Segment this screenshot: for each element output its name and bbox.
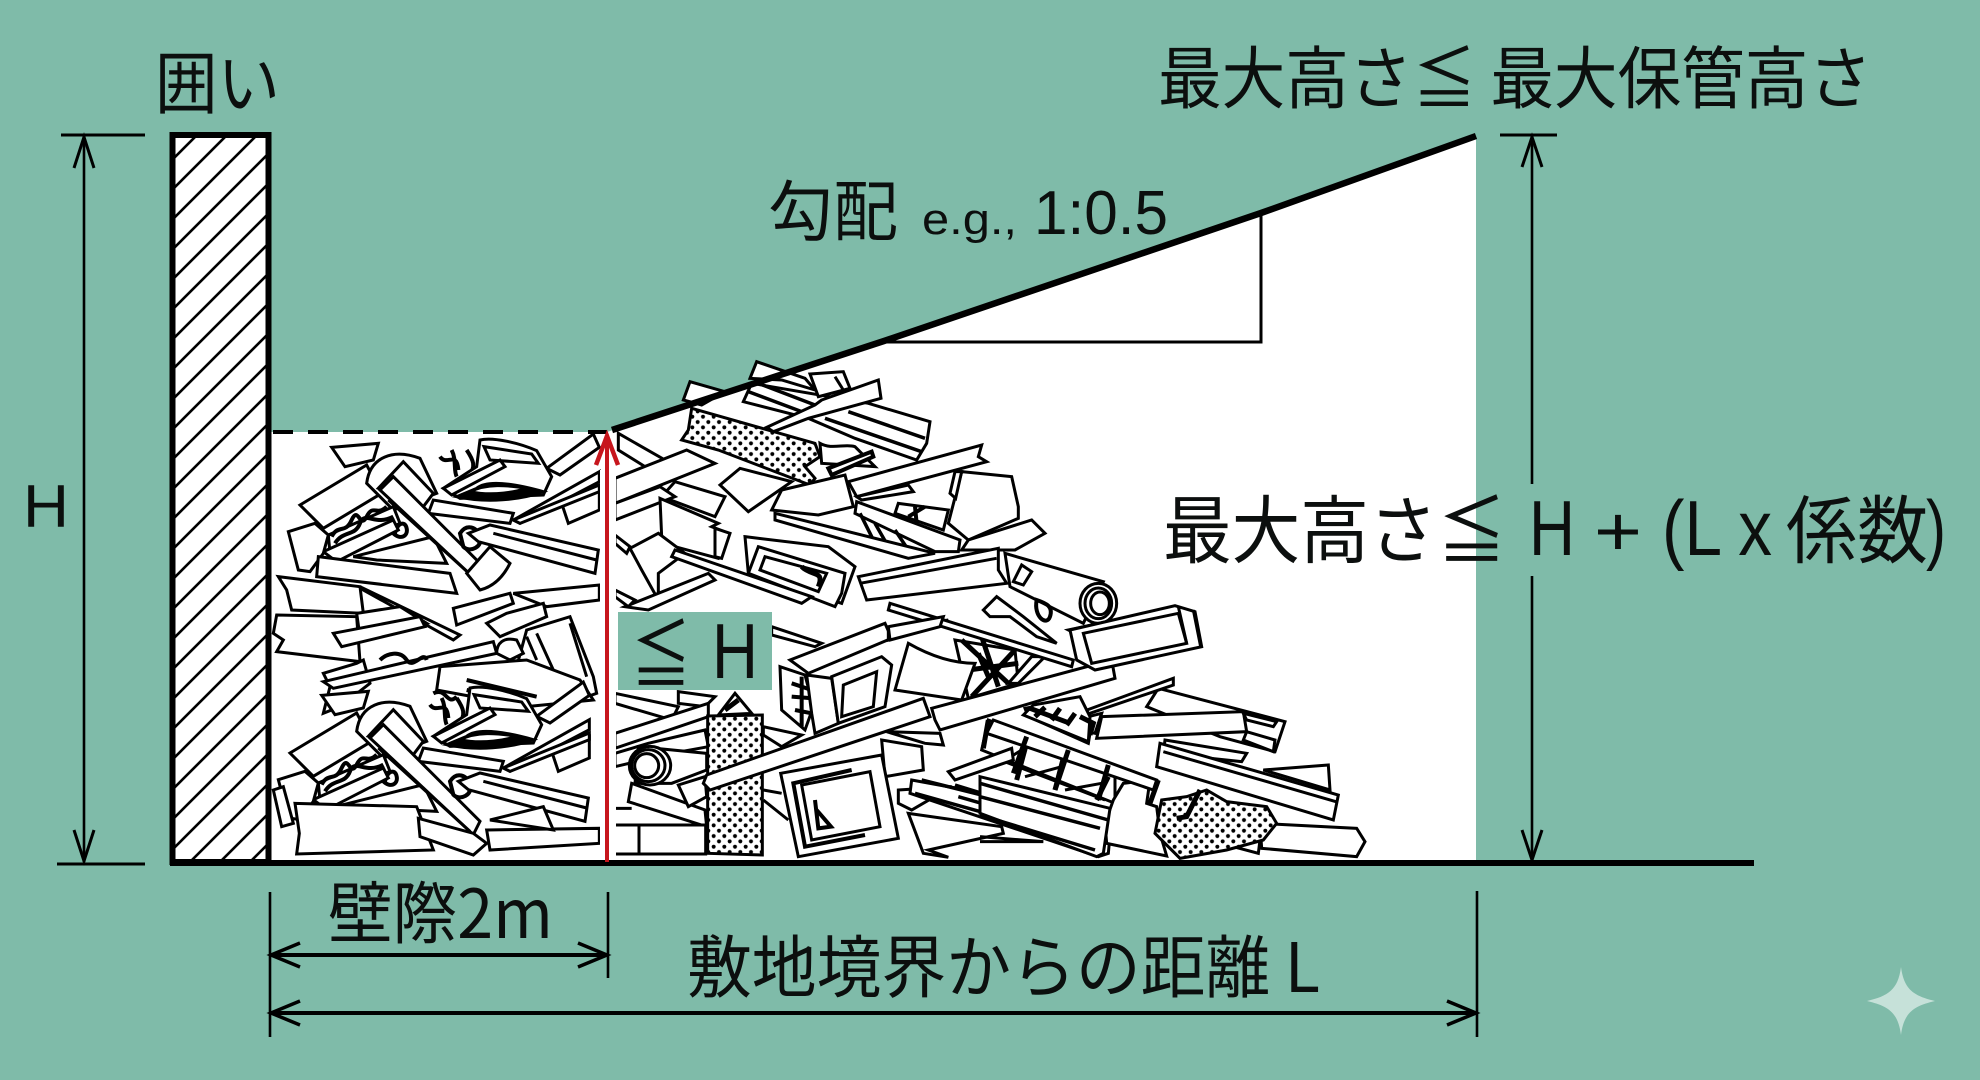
white gap and red arrow: height limit at wall clearance bbox=[596, 436, 618, 862]
debris: left pile bottom blocks bbox=[273, 787, 599, 855]
dimension: distance L arrow bbox=[271, 1001, 1476, 1025]
label: wall clearance: 壁際2m bbox=[328, 859, 553, 958]
white storage area under slope bbox=[271, 136, 1476, 862]
slope line bbox=[612, 136, 1476, 430]
debris: pipe behind centre beam bbox=[983, 553, 1117, 643]
debris: right pile upper part bbox=[615, 362, 1045, 610]
dimension: wall height H bbox=[57, 135, 145, 864]
slope triangle bbox=[884, 213, 1261, 342]
debris: left pile lower cluster bbox=[278, 682, 589, 835]
label: slope: 勾配 bbox=[768, 159, 898, 255]
dimension: wall clearance 2m bbox=[270, 891, 1477, 1037]
debris: left pile upper cluster bbox=[288, 434, 599, 587]
debris: right pile lower-left part bbox=[615, 620, 1115, 857]
label: slope bbox=[768, 159, 1168, 255]
dashed height line bbox=[273, 430, 607, 434]
label: maximum height formula: + bbox=[1594, 492, 1642, 570]
label: distance from boundary: 敷地境界からの距離 L bbox=[687, 913, 1320, 1012]
label: slope: e.g., bbox=[922, 195, 1017, 244]
debris: right pile lower-right part bbox=[980, 678, 1365, 858]
label: maximum height formula bbox=[1163, 472, 1946, 579]
label: H: H bbox=[23, 473, 69, 540]
label: maximum height formula: H bbox=[1529, 484, 1575, 572]
label: maximum height formula: 係数 bbox=[1786, 472, 1928, 579]
panel: debris pile bbox=[273, 362, 1365, 858]
label: enclosure: 囲い bbox=[155, 29, 280, 128]
debris: left pile middle planks bbox=[273, 547, 599, 713]
label: ≦ H box: H bbox=[712, 607, 758, 695]
label: maximum height formula: 最大高さ≦ bbox=[1163, 472, 1506, 579]
label: ≦ H box: ≦ bbox=[631, 596, 691, 703]
dimension: right height bbox=[1500, 135, 1557, 860]
debris: cardboard box on pile bbox=[888, 603, 1202, 670]
icon: sparkle bbox=[1867, 967, 1935, 1035]
wall: hatched enclosure bbox=[172, 135, 268, 862]
label: maximum height formula: ) bbox=[1926, 484, 1946, 572]
label: slope: 1:0.5 bbox=[1034, 179, 1168, 248]
ground line bbox=[170, 860, 1754, 866]
label: maximum height formula: (L x bbox=[1662, 484, 1772, 572]
label: maximum height top: 最大高さ≦ 最大保管高さ bbox=[1158, 24, 1872, 123]
label: ≦ H box bbox=[618, 596, 772, 703]
